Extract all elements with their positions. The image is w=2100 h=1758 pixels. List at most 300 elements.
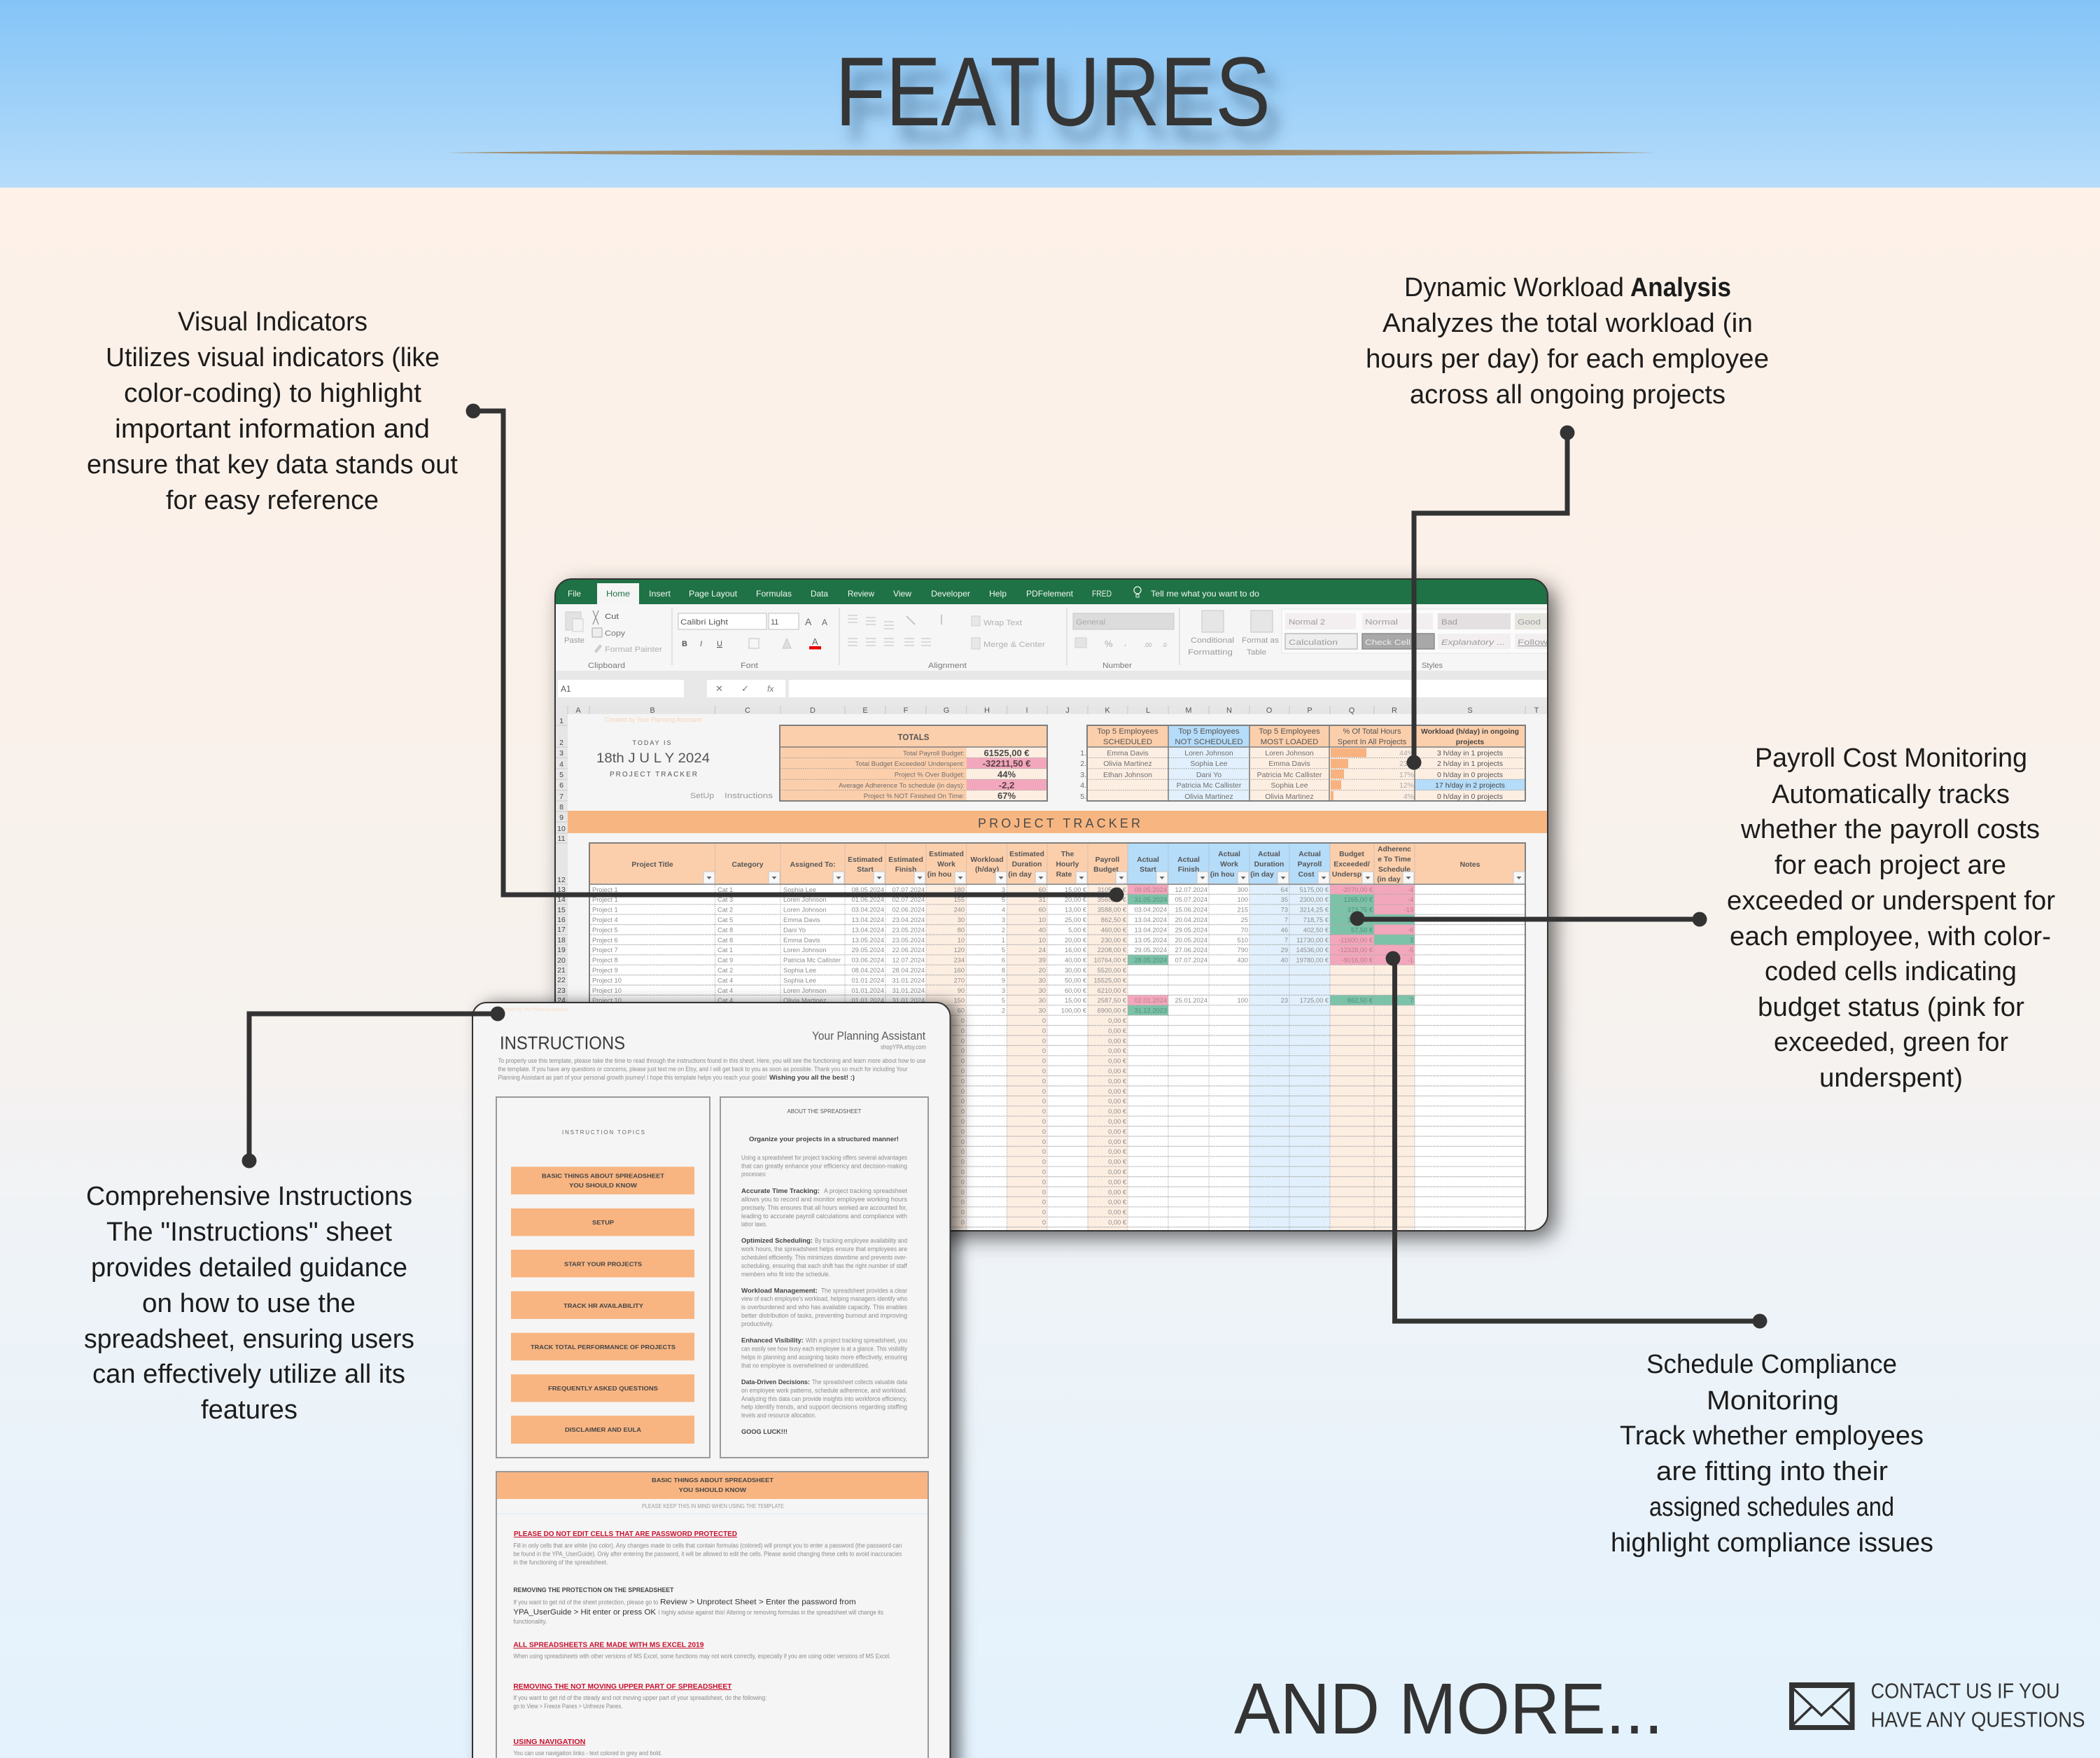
text block: Payroll Cost Monitoring: coded cells indicating (1765, 957, 2017, 986)
table rows: 0 (961, 1178, 965, 1185)
about the spreadsheet box: is overburdened and who has available capacity. This enables (741, 1304, 908, 1311)
table header labels: Notes (1460, 861, 1480, 869)
column headers: N (1226, 706, 1232, 715)
table rows: 7 (1410, 997, 1413, 1004)
about the spreadsheet box: can easily see how busy each employee is at a glance. This visibility (741, 1346, 908, 1353)
Excel ribbon commands: U (717, 640, 722, 648)
column headers: A (575, 706, 581, 715)
row headers: 23 (557, 986, 566, 995)
table header labels: (in day (1377, 876, 1401, 884)
table rows: 31.05.2024 (1134, 896, 1167, 903)
about the spreadsheet box: productivity. (741, 1320, 774, 1327)
table rows: 8 (1002, 967, 1005, 974)
basic things box: functionality. (513, 1618, 547, 1625)
table rows: 160 (953, 967, 965, 974)
totals table: Average Adherence To schedule (in days): (839, 782, 965, 790)
topic button: track HR availability (511, 1291, 694, 1319)
Excel ribbon commands: General (1076, 618, 1105, 627)
table rows: 862,50 € (1348, 997, 1373, 1004)
text block: Comprehensive Instructions: on how to use the (142, 1289, 356, 1318)
text block: Comprehensive Instructions: features (201, 1395, 298, 1425)
table rows: 270 (953, 977, 965, 984)
column headers: D (810, 706, 816, 715)
column headers: R (1392, 706, 1397, 715)
totals table: -32211,50 € (983, 758, 1030, 769)
table rows: 0 (961, 1118, 965, 1125)
table rows: 25.01.2024 (1175, 997, 1208, 1004)
totals table: Total Payroll Budget: (903, 750, 965, 758)
topic button: disclaimer: DISCLAIMER AND EULA (565, 1426, 641, 1433)
table rows: 150 (953, 997, 965, 1004)
table rows: 2300,00 € (1300, 896, 1329, 903)
topic button: setup: SETUP (592, 1219, 614, 1226)
table rows: 0 (1042, 1058, 1046, 1065)
about the spreadsheet box: A project tracking spreadsheet (824, 1187, 908, 1194)
totals table (780, 725, 1047, 801)
text block: Schedule Compliance Monitoring: Track whether employees (1620, 1421, 1924, 1451)
header band (0, 0, 2100, 188)
table rows: 0 (961, 1159, 965, 1166)
text block: Payroll Cost Monitoring: underspent) (1819, 1063, 1963, 1093)
table header labels: Estimated (1009, 851, 1044, 858)
table rows: 02.07.2024 (892, 896, 925, 903)
row headers: 18 (557, 936, 566, 944)
table rows: 25 (1241, 916, 1248, 923)
table rows: 0 (1042, 1098, 1046, 1105)
table header labels: (in hou (927, 871, 951, 879)
Excel ribbon commands: % (1105, 639, 1113, 649)
table rows: Cat 9 (718, 957, 733, 964)
title: FEATURES (835, 36, 1270, 146)
table rows: 0,00 € (1108, 1068, 1127, 1075)
about the spreadsheet box: labor laws. (741, 1221, 767, 1228)
about the spreadsheet box: on employee work patterns, schedule adherence, and workload. (741, 1387, 907, 1394)
table rows: 0 (961, 1189, 965, 1196)
table rows: Sophia Lee (783, 977, 816, 984)
Excel ribbon tabs: Help (989, 589, 1007, 599)
table rows: 31.01.2024 (892, 987, 925, 994)
about the spreadsheet box: work hours, the spreadsheet helps ensure that employees are (741, 1246, 907, 1253)
basic things box: be found in the YPA_UserGuide). Only after entering the password, it will be allowed to edit the cells. Please avoid changing these cells to avoid inaccuracies (513, 1551, 902, 1558)
table rows: 0 (961, 1148, 965, 1155)
table rows: 20.05.2024 (1175, 937, 1208, 944)
project tracker banner: PROJECT TRACKER (978, 816, 1140, 830)
top employees table: 17% (1399, 771, 1414, 779)
formula bar: A1 (561, 684, 571, 694)
basic things box: PLEASE KEEP THIS IN MIND WHEN USING THE TEMPLATE (642, 1502, 784, 1509)
table rows: 30 (1039, 977, 1046, 984)
top employees table: Loren Johnson (1184, 749, 1233, 758)
table header labels: e To Time (1378, 856, 1411, 864)
column headers: P (1307, 706, 1312, 715)
table rows: 0,00 € (1108, 1128, 1127, 1135)
totals table: 61525,00 € (983, 748, 1030, 758)
totals table: -2,2 (999, 780, 1014, 790)
row headers: 24 (557, 996, 566, 1005)
table rows: 30 (1039, 1007, 1046, 1014)
table rows: 0,00 € (1108, 1108, 1127, 1115)
table rows: 1725,00 € (1300, 997, 1329, 1004)
table rows: 01.01.2024 (851, 987, 884, 994)
table rows: 3565,00 € (1098, 896, 1127, 903)
table rows: Loren Johnson (783, 987, 827, 994)
top employees table: 23% (1399, 760, 1414, 768)
about the spreadsheet box: Data-Driven Decisions: (741, 1379, 810, 1386)
table rows: 14536,00 € (1296, 947, 1329, 954)
Excel ribbon commands: Calibri Light (680, 618, 728, 627)
totals table: TOTALS (898, 734, 930, 742)
text block: Payroll Cost Monitoring: for each project are (1774, 851, 2006, 880)
table rows: 19780,00 € (1296, 957, 1329, 964)
text block: Visual Indicators: Visual Indicators (178, 307, 368, 337)
project tracker banner (568, 811, 1548, 833)
top employees table: Patricia Mc Callister (1257, 771, 1322, 779)
instructions heading block (498, 1006, 926, 1081)
table rows: 01.01.2024 (851, 977, 884, 984)
table header labels: Assigned To: (790, 861, 836, 869)
instruction topics box: INSTRUCTION TOPICS (562, 1129, 645, 1136)
table header labels: The (1061, 851, 1074, 858)
top employees table: Olivia Martinez (1103, 760, 1152, 768)
table rows: 60,00 € (1065, 987, 1087, 994)
topic button: basic things: BASIC THINGS ABOUT SPREADSHEET (542, 1172, 665, 1179)
column headers: M (1185, 706, 1192, 715)
table rows: 03.06.2024 (851, 957, 884, 964)
instructions heading block: Wishing you all the best! :) (769, 1074, 855, 1081)
table rows: 30 (1039, 987, 1046, 994)
table rows: -12328,00 € (1338, 947, 1373, 954)
top employees table: 3. (1080, 771, 1086, 779)
table rows: 3588,00 € (1098, 907, 1127, 914)
Excel ribbon commands: Number (1102, 662, 1132, 670)
top employees table: Ethan Johnson (1103, 771, 1152, 779)
basic things box: REMOVING THE NOT MOVING UPPER PART OF SPREADSHEET (513, 1683, 732, 1691)
table rows: 0,00 € (1108, 1219, 1127, 1226)
top employees table: NOT SCHEDULED (1175, 738, 1243, 746)
table rows: 0 (961, 1209, 965, 1216)
table rows: Cat 5 (718, 916, 733, 923)
table rows: 0,00 € (1108, 1189, 1127, 1196)
table rows: Cat 1 (718, 947, 733, 954)
table rows: -6 (1408, 926, 1413, 933)
basic things box: Review > Unprotect Sheet > Enter the password from (660, 1598, 856, 1607)
Excel ribbon commands: Conditional (1191, 636, 1234, 645)
row headers (556, 714, 568, 1002)
table rows: Project 6 (592, 937, 618, 944)
table rows: Cat 4 (718, 977, 733, 984)
table rows: Project 10 (592, 987, 622, 994)
table rows: 862,50 € (1101, 916, 1127, 923)
text block: Payroll Cost Monitoring: Automatically tracks (1772, 780, 2010, 809)
top employees table: Olivia Martinez (1184, 793, 1233, 801)
table rows: 0,00 € (1108, 1077, 1127, 1084)
basic things box: REMOVING THE PROTECTION ON THE SPREADSHEET (513, 1586, 674, 1593)
table header labels: Actual (1298, 851, 1321, 858)
Excel ribbon commands: Follow (1518, 639, 1548, 647)
top employees table: 0 h/day in 0 projects (1437, 771, 1503, 779)
Excel ribbon commands: .00 (1144, 642, 1152, 648)
table rows: 28.04.2024 (892, 967, 925, 974)
icon: envelope (1789, 1682, 1854, 1728)
table header labels: Budget (1093, 866, 1119, 874)
table rows: 27.06.2024 (1175, 947, 1208, 954)
table rows: 0 (1042, 1128, 1046, 1135)
table rows: 40,00 € (1065, 957, 1087, 964)
instructions heading block: the template. If you have any questions or concerns, please just text me on Etsy, and I will get back to you as soon as possible. Thank you so much for including Your (498, 1066, 908, 1073)
text block: Payroll Cost Monitoring: each employee, with color- (1730, 922, 2051, 951)
top employees table: Workload (h/day) in ongoing (1421, 728, 1519, 736)
text block: Dynamic Workload Analysis: hours per day) for each employee (1366, 344, 1769, 374)
table rows: Loren Johnson (783, 947, 827, 954)
instruction topics box (496, 1097, 710, 1458)
table rows: 2 (1002, 1007, 1005, 1014)
top employees table: Top 5 Employees (1178, 727, 1240, 736)
text block: Visual Indicators: for easy reference (166, 486, 379, 515)
table header labels: Exceeded/ (1334, 861, 1370, 868)
table rows: 24 (1039, 947, 1046, 954)
contact text (1871, 1679, 2085, 1732)
table rows: 3214,25 € (1300, 907, 1329, 914)
table rows: 3 (1002, 987, 1005, 994)
instructions heading block: To properly use this template, please take the time to read through the instructions found in this sheet. Here, you will see the functioning and learn more about how to use (498, 1057, 926, 1064)
table header labels: Duration (1012, 861, 1042, 868)
table rows: 70 (1241, 926, 1248, 933)
Excel ribbon commands: Good (1518, 618, 1541, 627)
connector: Dynamic Workload Analysis (1407, 426, 1575, 770)
row headers: 13 (557, 886, 566, 894)
table rows: 12.07.2024 (1175, 886, 1208, 893)
table rows: 5520,00 € (1098, 967, 1127, 974)
table rows: 7 (1284, 916, 1288, 923)
table rows: 0 (1042, 1077, 1046, 1084)
table rows: Project 4 (592, 916, 618, 923)
table rows: Project 7 (592, 947, 618, 954)
Excel ribbon commands: Font (741, 662, 758, 670)
formula bar: fx (767, 684, 774, 694)
table rows: 10 (958, 937, 965, 944)
basic things box: When using spreadsheets with other versions of MS Excel, some functions may not work correctly, especially if you are using older versions of MS Excel. (513, 1653, 890, 1660)
table rows: 15,00 € (1065, 997, 1087, 1004)
topic button: setup (511, 1208, 694, 1236)
closing text: and more: AND MORE... (1234, 1668, 1663, 1749)
table header labels: Workload (970, 856, 1004, 864)
table header labels: Work (937, 861, 955, 868)
table header labels: (in hou (1210, 871, 1234, 879)
table rows: 1 (1002, 937, 1005, 944)
table rows: 0,00 € (1108, 1118, 1127, 1125)
table rows: 31.12.2023 (1134, 1007, 1167, 1014)
table rows: 23.04.2024 (892, 916, 925, 923)
table header labels: (in day (1250, 871, 1274, 879)
table rows: 02.06.2024 (892, 907, 925, 914)
table rows: 40 (1281, 957, 1288, 964)
top employees table: 4. (1080, 781, 1086, 790)
table rows: 90 (958, 987, 965, 994)
text block: Schedule Compliance Monitoring: assigned schedules and (1649, 1493, 1894, 1522)
conditional colour cells (1128, 884, 1415, 1015)
table rows: 01.06.2024 (851, 896, 884, 903)
top employees table: Top 5 Employees (1097, 727, 1158, 736)
table rows: 0 (1042, 1148, 1046, 1155)
sheet title block: TODAY IS (632, 739, 673, 746)
table rows: 230,00 € (1101, 937, 1127, 944)
table rows: 5 (1002, 947, 1005, 954)
column headers: H (984, 706, 990, 715)
table rows: Patricia Mc Callister (783, 957, 841, 964)
table rows: 20,00 € (1065, 937, 1087, 944)
table rows: -13 (1404, 907, 1413, 914)
totals table: 44% (997, 769, 1016, 780)
basic things box: BASIC THINGS ABOUT SPREADSHEET (652, 1477, 774, 1484)
basic things box: I highly advise against this! Altering or removing formulas in the spreadsheet will change its (658, 1609, 884, 1616)
Excel ribbon commands: Format Painter (605, 646, 662, 654)
table rows: 05.07.2024 (1175, 896, 1208, 903)
table rows: 09.05.2024 (1134, 886, 1167, 893)
top employees table: 3 h/day in 1 projects (1437, 749, 1503, 758)
about the spreadsheet box: members who fit into the schedule. (741, 1271, 830, 1278)
sheet title block: 18th J U L Y 2024 (596, 751, 710, 766)
table rows: Cat 2 (718, 967, 733, 974)
table rows: 07.07.2024 (1175, 957, 1208, 964)
table rows: 10 (1039, 916, 1046, 923)
table rows: 0 (961, 1128, 965, 1135)
about the spreadsheet box: allows you to record and monitor employee working hours (741, 1196, 908, 1203)
about the spreadsheet box: The spreadsheet collects valuable data (812, 1379, 907, 1386)
table rows: 3 (1410, 916, 1413, 923)
Excel ribbon tabs: Developer (931, 589, 970, 599)
table rows: 2587,50 € (1098, 997, 1127, 1004)
table rows: 718,75 € (1303, 916, 1329, 923)
basic things box: ALL SPREADSHEETS ARE MADE WITH MS EXCEL 2019 (513, 1642, 704, 1649)
text block: Payroll Cost Monitoring: exceeded or underspent for (1727, 886, 2055, 916)
table rows: 0 (961, 1138, 965, 1145)
table rows: 15.06.2024 (1175, 907, 1208, 914)
top employees table: Dani Yo (1196, 771, 1222, 779)
table rows: Cat 3 (718, 896, 733, 903)
table rows: -5 (1408, 947, 1413, 954)
table rows: 20,00 € (1065, 896, 1087, 903)
text block: Schedule Compliance Monitoring: are fitting into their (1656, 1457, 1888, 1486)
about the spreadsheet box: helps in planning and assigning tasks more effectively, ensuring (741, 1354, 907, 1361)
table rows: 7 (1284, 937, 1288, 944)
table rows: Project 8 (592, 957, 618, 964)
table rows: 23.05.2024 (892, 937, 925, 944)
table rows: 30 (1039, 997, 1046, 1004)
table rows: 29.05.2024 (1134, 947, 1167, 954)
row headers: 5 (559, 771, 564, 779)
table rows: 143,75 € (1348, 916, 1373, 923)
table header labels: Start (1140, 866, 1156, 874)
about the spreadsheet box: Enhanced Visibility: (741, 1337, 804, 1344)
text block: Payroll Cost Monitoring (1727, 744, 2055, 1093)
table rows: 0 (1042, 1118, 1046, 1125)
table rows: -1 (1408, 957, 1413, 964)
table rows: 0 (961, 1199, 965, 1206)
table rows: 6210,00 € (1098, 987, 1127, 994)
column headers: O (1266, 706, 1273, 715)
table header labels: Hourly (1056, 861, 1079, 868)
sheet title block: PROJECT TRACKER (610, 771, 697, 779)
table rows: 0 (1042, 1159, 1046, 1166)
table rows: Cat 4 (718, 987, 733, 994)
topic button: disclaimer (511, 1416, 694, 1444)
row headers: 22 (557, 976, 566, 984)
column headers (555, 706, 1548, 715)
project tracker table (589, 843, 1525, 1231)
about the spreadsheet box: Accurate Time Tracking: (741, 1187, 820, 1194)
totals table: Total Budget Exceeded/ Underspent: (855, 760, 965, 768)
table rows: 03.04.2024 (1134, 907, 1167, 914)
totals table: 67% (997, 790, 1016, 801)
table rows: 0 (961, 1077, 965, 1084)
table rows: 29.05.2024 (851, 947, 884, 954)
table rows: 0 (1042, 1047, 1046, 1054)
table rows: 100,00 € (1061, 1007, 1087, 1014)
instructions heading block: INSTRUCTIONS (500, 1032, 625, 1053)
top employees table: Sophia Lee (1190, 760, 1228, 768)
Excel ribbon tabs: Insert (649, 589, 671, 599)
table rows: Emma Davis (783, 937, 820, 944)
table rows: Cat 8 (718, 926, 733, 933)
about the spreadsheet box: By tracking employee availability and (815, 1237, 907, 1244)
Excel ribbon commands: Alignment (928, 662, 967, 670)
table rows: 5 (1002, 997, 1005, 1004)
text block: Schedule Compliance Monitoring: Monitoring (1707, 1386, 1839, 1416)
table rows: Cat 2 (718, 907, 733, 914)
totals table: Project % NOT Finished On Time: (864, 793, 965, 800)
table rows: 0,00 € (1108, 1168, 1127, 1176)
connector: Comprehensive Instructions (242, 1007, 505, 1168)
table rows: 0 (1042, 1068, 1046, 1075)
table header labels: Work (1220, 861, 1238, 868)
table rows: -4 (1408, 886, 1413, 893)
text block: Visual Indicators: important information and (115, 414, 430, 444)
table rows: 29.05.2024 (1175, 926, 1208, 933)
table rows: 50,00 € (1065, 977, 1087, 984)
topic button: track total performance: TRACK TOTAL PERFORMANCE OF PROJECTS (531, 1344, 676, 1351)
top employees table: 1. (1080, 749, 1086, 758)
column headers: I (1026, 706, 1028, 715)
top employees table: Loren Johnson (1265, 749, 1314, 758)
row headers: 4 (559, 760, 564, 769)
table rows: 0 (961, 1058, 965, 1065)
row headers: 12 (557, 876, 566, 884)
top employees table: 0 h/day in 0 projects (1437, 793, 1503, 801)
about the spreadsheet box: view of each employee's workload, helping managers identify who (741, 1295, 907, 1302)
top employees table: projects (1456, 739, 1484, 746)
table rows: 20.04.2024 (1175, 916, 1208, 923)
text block: Visual Indicators: Utilizes visual indicators (like (106, 343, 440, 372)
table rows: 0 (961, 1068, 965, 1075)
table rows: 5175,00 € (1300, 886, 1329, 893)
table rows: 0,00 € (1108, 1148, 1127, 1155)
table rows: Dani Yo (783, 926, 806, 933)
top employees table: 2. (1080, 760, 1086, 768)
text block: Dynamic Workload Analysis (1366, 273, 1769, 410)
Excel ribbon tabs: PDFelement (1026, 589, 1074, 599)
table rows: 373,75 € (1348, 907, 1373, 914)
table header labels: Duration (1254, 861, 1284, 868)
column headers: E (862, 706, 868, 715)
column headers: C (745, 706, 750, 715)
table rows: 0 (1042, 1038, 1046, 1045)
table rows: 3 (1002, 916, 1005, 923)
table rows: 46 (1281, 926, 1288, 933)
table rows: Cat 4 (718, 997, 733, 1004)
table rows: 0,00 € (1108, 1159, 1127, 1166)
table header labels: Actual (1258, 851, 1280, 858)
topic button: track HR availability: TRACK HR AVAILABILITY (564, 1302, 643, 1309)
